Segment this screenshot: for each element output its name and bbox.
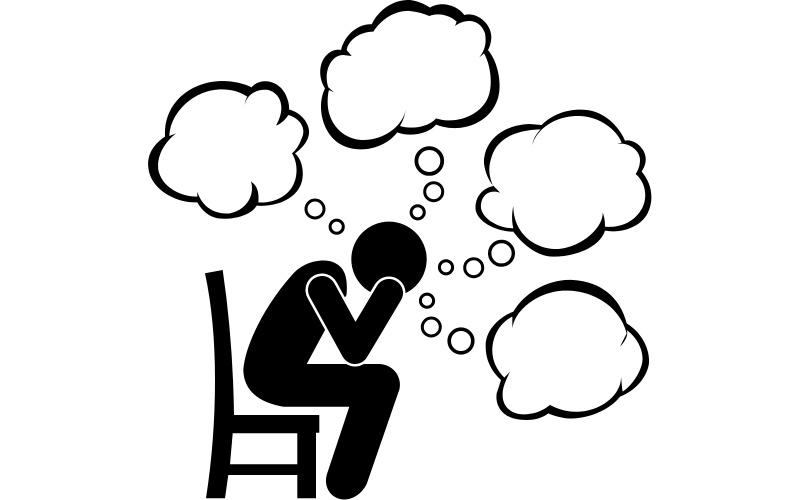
arm and hands on head bbox=[322, 290, 389, 350]
head bbox=[351, 222, 427, 297]
thought cloud: right upper bbox=[476, 110, 651, 257]
body and leg bbox=[243, 261, 400, 500]
thought bubbles bbox=[306, 148, 513, 353]
thought cloud: top bbox=[320, 0, 500, 149]
chair bbox=[205, 270, 319, 498]
person bbox=[243, 222, 427, 500]
thought cloud: right lower bbox=[486, 280, 649, 420]
thought cloud: left bbox=[148, 81, 309, 219]
